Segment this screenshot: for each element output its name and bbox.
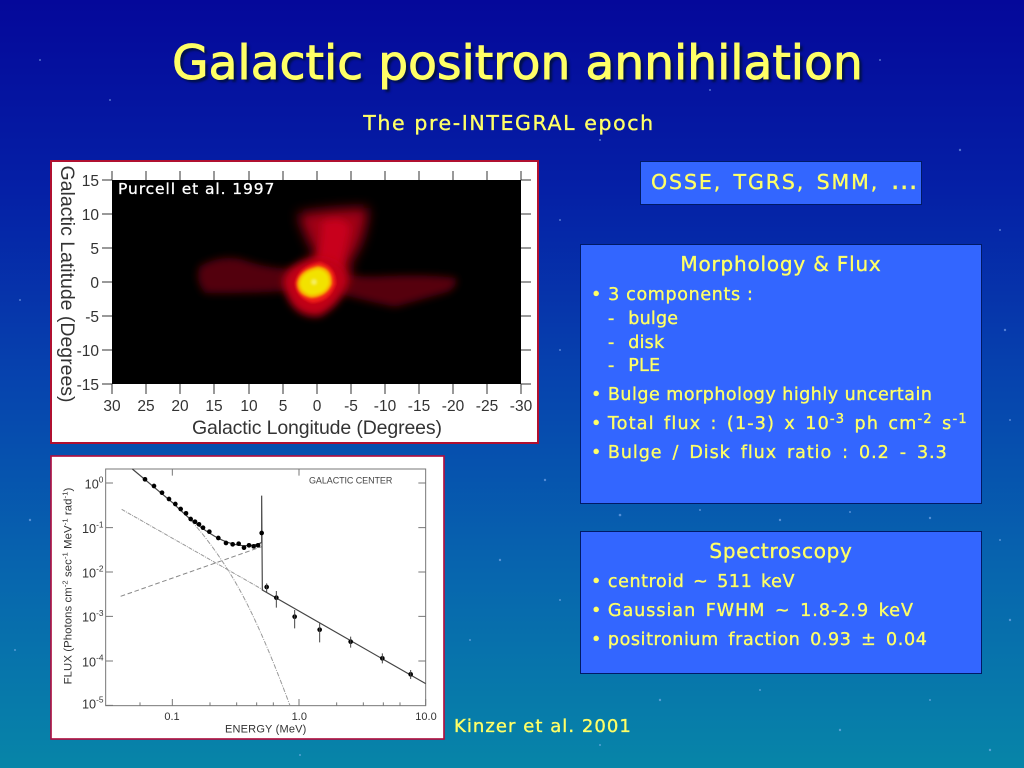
y axis title: Galactic Latitude (Degrees) <box>56 166 78 402</box>
x tick labels: 10 <box>240 398 258 415</box>
x tick labels: -25 <box>476 398 498 415</box>
bullet: total flux: • Total flux : (1-3) x 10-3 ph cm-2 s-1 <box>591 412 968 434</box>
y axis title: -1 <box>60 492 69 498</box>
y tick labels: 10 <box>82 522 96 536</box>
x tick labels: 25 <box>137 398 155 415</box>
caption: Purcell et al. 1997: Purcell et al. 1997 <box>118 180 275 198</box>
y tick labels: 15 <box>82 173 99 190</box>
y tick labels: -10 <box>77 343 99 360</box>
y tick labels: 0 <box>90 275 99 292</box>
panel: Kinzer spectrum chart <box>50 455 445 740</box>
subtitle: The pre-INTEGRAL epoch <box>363 111 655 135</box>
x tick labels: 30 <box>103 398 121 415</box>
error bars <box>267 583 411 679</box>
sub-list: - PLE <box>608 356 660 376</box>
bullet: components: • 3 components : <box>591 285 754 305</box>
panel: OSSE TGRS SMM <box>640 161 922 205</box>
y axis title: -1 <box>60 552 69 559</box>
sky map image <box>112 180 521 384</box>
y tick labels: 10 <box>85 477 99 491</box>
x tick labels <box>164 711 437 723</box>
x tick labels: 0.1 <box>164 711 180 723</box>
instruments text: OSSE, TGRS, SMM, … <box>651 165 918 196</box>
y tick labels: 5 <box>90 241 99 258</box>
y tick labels: -1 <box>96 519 104 529</box>
y tick labels: 10 <box>82 566 96 580</box>
y axis title: -2 <box>60 580 69 587</box>
x axis title: Galactic Longitude (Degrees) <box>192 417 442 439</box>
y tick labels: 0 <box>99 475 104 485</box>
x tick labels: 5 <box>279 398 287 415</box>
bullet: FWHM: • Gaussian FWHM ~ 1.8-2.9 keV <box>591 601 914 621</box>
title: Galactic positron annihilation <box>172 36 863 91</box>
x axis title: ENERGY (MeV) <box>225 724 306 736</box>
y axis title: -1 <box>60 518 69 525</box>
model curves <box>121 469 426 706</box>
sub-list: - disk <box>608 333 664 353</box>
data points <box>143 477 413 677</box>
x tick labels: -5 <box>344 398 358 415</box>
y axis title: MeV <box>62 525 74 552</box>
y tick labels: 10 <box>82 697 96 711</box>
x tick labels: -15 <box>408 398 430 415</box>
x tick labels: -20 <box>442 398 465 415</box>
chart label: GALACTIC CENTER <box>309 475 393 485</box>
panel: Morphology & Flux <box>580 244 982 504</box>
bullet: centroid: • centroid ~ 511 keV <box>591 572 795 592</box>
plot frame and ticks <box>106 469 426 706</box>
y tick labels: -4 <box>96 653 104 663</box>
y axis title: rad <box>62 499 74 518</box>
x tick labels: 1.0 <box>292 711 307 723</box>
y tick labels: 10 <box>82 655 96 669</box>
panel: Spectroscopy <box>580 531 982 674</box>
y tick labels: -5 <box>85 309 99 326</box>
y tick labels: -3 <box>96 608 104 618</box>
y tick labels: -15 <box>77 377 99 394</box>
x tick labels: 10.0 <box>415 711 437 723</box>
x tick labels: 0 <box>313 398 322 415</box>
y tick labels <box>77 173 99 394</box>
x tick labels: 15 <box>205 398 223 415</box>
y axis title: ) <box>62 487 74 491</box>
heading: Spectroscopy <box>709 539 853 563</box>
y axis title: FLUX (Photons cm <box>62 587 74 684</box>
sub-list: - bulge <box>608 309 678 329</box>
y tick labels: 10 <box>82 207 99 224</box>
bullet: bulge morphology: • Bulge morphology highly uncertain <box>591 385 932 405</box>
y axis title: sec <box>62 559 74 580</box>
x tick labels: -10 <box>374 398 397 415</box>
y tick labels: -2 <box>96 564 104 574</box>
caption: Kinzer et al. 2001: Kinzer et al. 2001 <box>454 716 632 737</box>
x tick labels: -30 <box>510 398 533 415</box>
bullet: flux ratio: • Bulge / Disk flux ratio : 0.2 - 3.3 <box>591 443 948 463</box>
bullet: positronium fraction: • positronium fraction 0.93 ± 0.04 <box>591 630 927 650</box>
x tick labels: 20 <box>171 398 189 415</box>
y tick labels: -5 <box>96 695 104 705</box>
x tick labels <box>103 398 533 415</box>
heading: Morphology & Flux <box>680 252 882 276</box>
panel: Purcell sky map <box>50 160 539 444</box>
sub-list <box>608 309 678 376</box>
axes ticks <box>102 171 531 394</box>
y tick labels: 10 <box>82 611 96 625</box>
y tick labels <box>82 475 104 711</box>
